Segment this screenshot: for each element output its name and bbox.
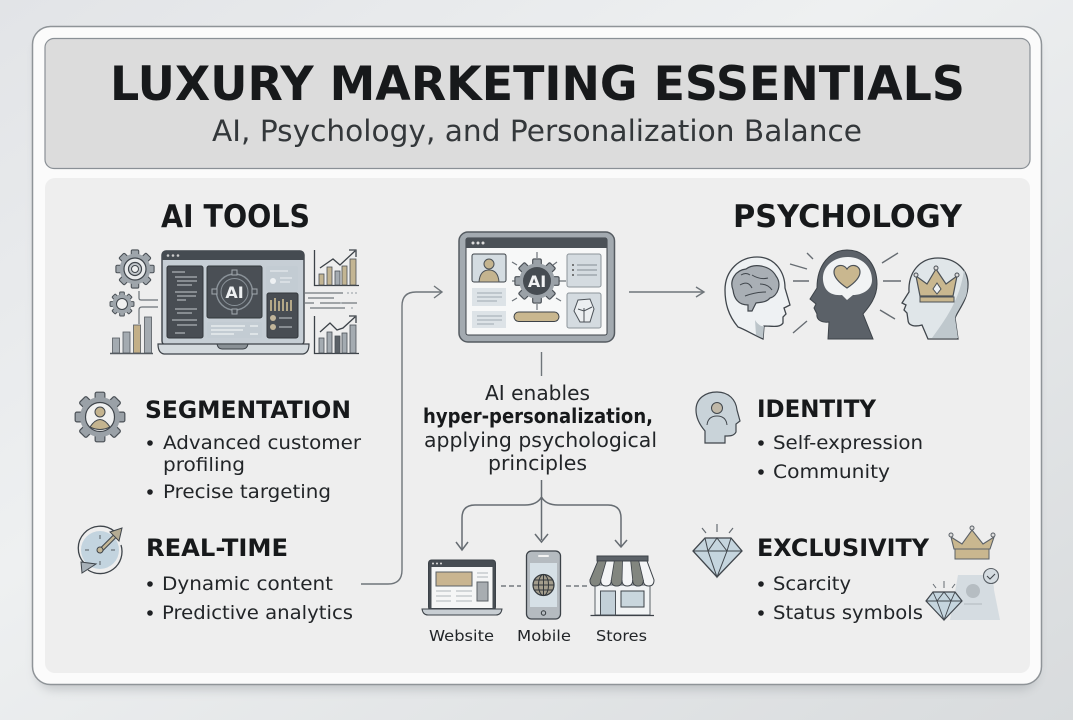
icon: head with crown <box>902 258 968 339</box>
bullet list <box>758 573 923 624</box>
heading: psychology: PSYCHOLOGY <box>733 199 963 235</box>
chart: bottom right <box>314 316 359 354</box>
arrow: real-time to AI hub <box>361 286 442 584</box>
title: LUXURY MARKETING ESSENTIALS <box>110 57 965 112</box>
chart: top right <box>314 250 359 286</box>
AI panel <box>207 266 262 318</box>
tan bar <box>514 312 559 322</box>
icon: gear with person <box>75 392 125 442</box>
icon: clock with arrows <box>78 526 122 574</box>
avatar box <box>472 254 506 282</box>
text block: center caption: applying psychological <box>424 428 657 452</box>
icon: psychology heads <box>725 250 968 339</box>
code panel <box>167 266 203 338</box>
bullet list: Precise targeting <box>163 481 331 503</box>
icon: identity head <box>696 392 740 443</box>
bullet list: Status symbols <box>773 602 923 624</box>
subtitle: AI, Psychology, and Personalization Balance <box>212 114 862 148</box>
bullet list: Predictive analytics <box>162 602 353 624</box>
icon: diamond <box>693 524 742 577</box>
small info panels <box>207 266 298 338</box>
data lines <box>305 293 357 308</box>
bullet list: Dynamic content <box>162 573 333 595</box>
bullet list: Self-expression <box>773 432 923 454</box>
heading: REAL-TIME <box>146 534 288 562</box>
icon: large gear <box>116 250 154 288</box>
AI gear <box>512 252 566 310</box>
heading: SEGMENTATION <box>145 396 351 424</box>
AI panel: AI <box>225 283 244 302</box>
icon: website laptop <box>422 560 502 615</box>
text block: center caption: principles <box>488 451 587 475</box>
icon: AI tools laptop illustration <box>110 250 359 354</box>
section: segmentation <box>75 392 361 503</box>
icon: central AI tablet <box>459 232 614 342</box>
labels: channels: Website <box>429 627 494 645</box>
text cards <box>472 288 506 328</box>
arrow: three-way branch to channels <box>456 480 627 550</box>
labels: channels <box>429 627 647 645</box>
rays <box>790 253 901 333</box>
heading: EXCLUSIVITY <box>757 534 930 562</box>
bullet list <box>147 432 361 503</box>
icon: small gear <box>110 292 134 316</box>
text block: center caption: AI enables <box>485 381 590 405</box>
connectors: dashed channel links <box>501 585 587 587</box>
icon: store <box>590 556 654 616</box>
section: real-time <box>78 526 353 624</box>
panel: main content background <box>45 178 1030 673</box>
laptop body <box>162 251 304 345</box>
list card <box>567 254 601 287</box>
icon: small diamond <box>926 581 962 620</box>
icon: crown <box>949 526 995 559</box>
bullet list: Advanced customer <box>163 432 361 454</box>
labels: channels: Mobile <box>517 627 571 645</box>
panel: header <box>45 38 1030 168</box>
bullet list: profiling <box>163 454 245 476</box>
icon card <box>567 293 601 328</box>
connector: tablet to caption <box>540 352 542 376</box>
AI gear: AI <box>528 272 546 291</box>
section: exclusivity <box>693 524 1000 624</box>
section: identity <box>696 392 923 483</box>
heading: AI tools: AI TOOLS <box>161 199 310 235</box>
text block: center caption <box>423 381 657 475</box>
icon: mobile phone <box>526 551 560 619</box>
icon: head with brain <box>725 257 790 339</box>
icon: head with heart <box>810 250 877 339</box>
labels: channels: Stores <box>596 627 647 645</box>
text block: center caption: hyper-personalization, <box>423 404 653 428</box>
bullet list <box>147 573 353 624</box>
heading: IDENTITY <box>757 395 877 423</box>
bar chart: left <box>110 317 153 354</box>
bullet list: Community <box>773 461 890 483</box>
icon: status card <box>950 568 1000 620</box>
bullet list: Scarcity <box>773 573 851 595</box>
arrow: tablet to psychology <box>629 287 704 297</box>
bullet list <box>758 432 923 483</box>
